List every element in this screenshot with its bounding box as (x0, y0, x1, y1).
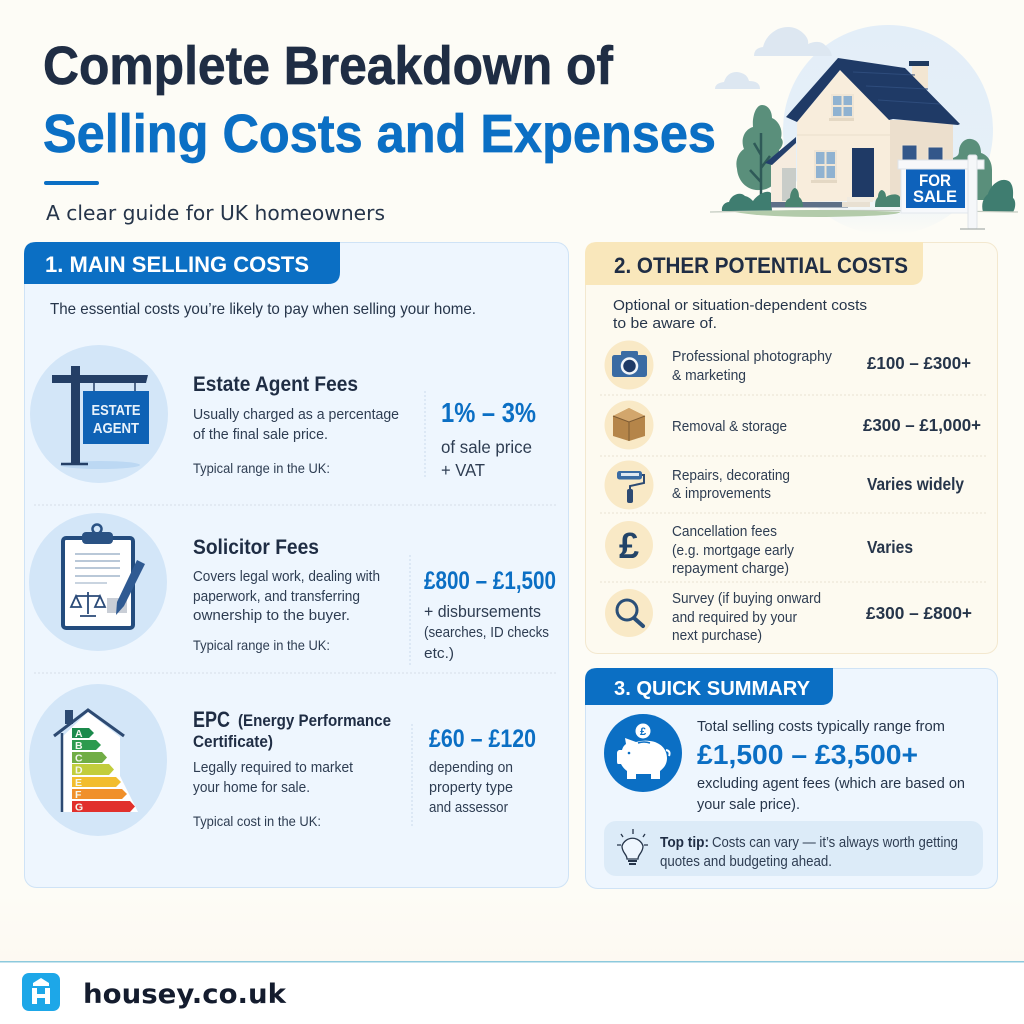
row: solicitor fees: Covers legal work, dealing with (193, 569, 380, 585)
row: solicitor fees: paperwork, and transferring (193, 589, 360, 605)
icon: camera (604, 340, 654, 390)
row: EPC: Legally required to market (193, 760, 353, 776)
icon: pound sign: £ (619, 525, 639, 566)
heading: quick summary (585, 668, 833, 705)
row: EPC: £60 – £120 (429, 725, 536, 753)
intro text: Optional or situation-dependent costs (613, 297, 867, 314)
heading: main selling costs (24, 242, 340, 284)
row: solicitor fees: £800 – £1,500 (424, 567, 556, 595)
title: Selling Costs and Expenses (43, 104, 716, 164)
heading: other potential costs: 2. OTHER POTENTIAL COSTS (614, 253, 908, 278)
heading: main selling costs: 1. MAIN SELLING COSTS (45, 252, 309, 277)
row: solicitor fees: (searches, ID checks (424, 624, 549, 641)
row: EPC (29, 684, 536, 836)
icon: piggy bank: £ (640, 726, 646, 738)
footer: housey.co.uk (83, 979, 287, 1010)
illustration: house with for sale sign: SALE (913, 187, 957, 206)
row: EPC: depending on (429, 760, 513, 776)
panel: quick summary (585, 668, 998, 888)
row: estate agent fees: of sale price (441, 437, 532, 457)
intro text: The essential costs you’re likely to pay when selling your home. (50, 301, 476, 318)
row: solicitor fees: Solicitor Fees (193, 536, 319, 559)
panel: quick summary: £1,500 – £3,500+ (697, 739, 918, 770)
title: Complete Breakdown of (43, 36, 614, 96)
callout: top tip: Top tip: (660, 834, 709, 851)
footer (0, 961, 1024, 1024)
row: EPC: (Energy Performance (238, 711, 391, 730)
icon: cardboard box (604, 400, 654, 450)
row: repairs: Repairs, decorating (672, 468, 790, 484)
icon: EPC rating house: D (75, 764, 83, 776)
row: EPC: your home for sale. (193, 780, 310, 796)
row: photography: Professional photography (672, 349, 833, 365)
row: EPC: and assessor (429, 800, 508, 816)
row: cancellation: Cancellation fees (672, 524, 777, 540)
panel: quick summary: excluding agent fees (which are based on (697, 775, 965, 792)
row: cancellation (605, 521, 913, 577)
illustration: house with for sale sign: FOR (919, 171, 951, 190)
callout: top tip: Costs can vary — it’s always worth getting (712, 834, 958, 851)
row: solicitor fees: Typical range in the UK: (193, 637, 330, 653)
icon: magnifying glass (605, 589, 653, 637)
callout: top tip (604, 821, 983, 876)
row: EPC: Certificate) (193, 732, 273, 751)
panel: quick summary: Total selling costs typically range from (697, 718, 945, 735)
icon: EPC rating house: G (75, 802, 83, 814)
row: repairs (604, 460, 964, 510)
row: solicitor fees (29, 513, 556, 666)
icon: lightbulb (617, 829, 648, 864)
title (43, 36, 716, 164)
icon: paint roller (604, 460, 654, 510)
row: repairs: Varies widely (867, 474, 964, 494)
row: solicitor fees: etc.) (424, 645, 454, 662)
row: survey (605, 589, 972, 644)
icon: EPC rating house: B (75, 740, 83, 752)
heading: quick summary: 3. QUICK SUMMARY (614, 677, 810, 700)
row: repairs: & improvements (672, 486, 771, 502)
icon: estate agent sign: ESTATE (92, 402, 140, 419)
row: survey: £300 – £800+ (866, 603, 972, 623)
icon: clipboard with scales and pen (29, 513, 167, 651)
panel: quick summary: your sale price). (697, 796, 800, 813)
row: EPC: EPC (193, 707, 230, 732)
icon: EPC rating house (29, 684, 167, 836)
row: cancellation: Varies (867, 537, 913, 557)
intro text (613, 297, 867, 332)
row: cancellation: (e.g. mortgage early (672, 543, 795, 559)
icon: EPC rating house: F (75, 789, 82, 801)
row: photography: £100 – £300+ (867, 353, 971, 373)
row: solicitor fees: ownership to the buyer. (193, 608, 350, 624)
row: survey: and required by your (672, 610, 797, 626)
icon: EPC rating house: E (75, 777, 82, 789)
row: estate agent fees: + VAT (441, 460, 485, 480)
illustration: house with for sale sign (710, 25, 1018, 235)
row: cancellation: repayment charge) (672, 561, 789, 577)
icon: EPC rating house: C (75, 752, 83, 764)
icon: estate agent sign: AGENT (93, 420, 139, 437)
row: photography: & marketing (672, 368, 746, 384)
intro text: to be aware of. (613, 315, 717, 332)
row: EPC: property type (429, 780, 513, 796)
icon: housey logo (22, 973, 60, 1011)
row: removal (604, 400, 981, 450)
row: survey: Survey (if buying onward (672, 591, 821, 607)
row: estate agent fees (30, 345, 536, 483)
row: solicitor fees: + disbursements (424, 603, 541, 621)
row: estate agent fees: 1% – 3% (441, 397, 536, 428)
callout: top tip: quotes and budgeting ahead. (660, 853, 832, 870)
row: estate agent fees: Estate Agent Fees (193, 373, 358, 396)
row: survey: next purchase) (672, 628, 762, 644)
row: removal: Removal & storage (672, 419, 787, 435)
panel: other potential costs (585, 242, 998, 654)
row: photography (604, 340, 971, 390)
icon: piggy bank (604, 714, 682, 792)
row: estate agent fees: Typical range in the UK: (193, 460, 330, 476)
heading: other potential costs (585, 242, 923, 285)
icon: pound sign (605, 521, 653, 569)
subtitle: A clear guide for UK homeowners (46, 201, 385, 225)
row: estate agent fees: of the final sale price. (193, 427, 328, 443)
row: estate agent fees: Usually charged as a percentage (193, 407, 399, 423)
row: EPC: Typical cost in the UK: (193, 813, 321, 829)
icon: estate agent sign (30, 345, 168, 483)
icon: EPC rating house: A (75, 728, 83, 740)
panel: main selling costs (24, 242, 568, 888)
row: removal: £300 – £1,000+ (863, 415, 981, 435)
